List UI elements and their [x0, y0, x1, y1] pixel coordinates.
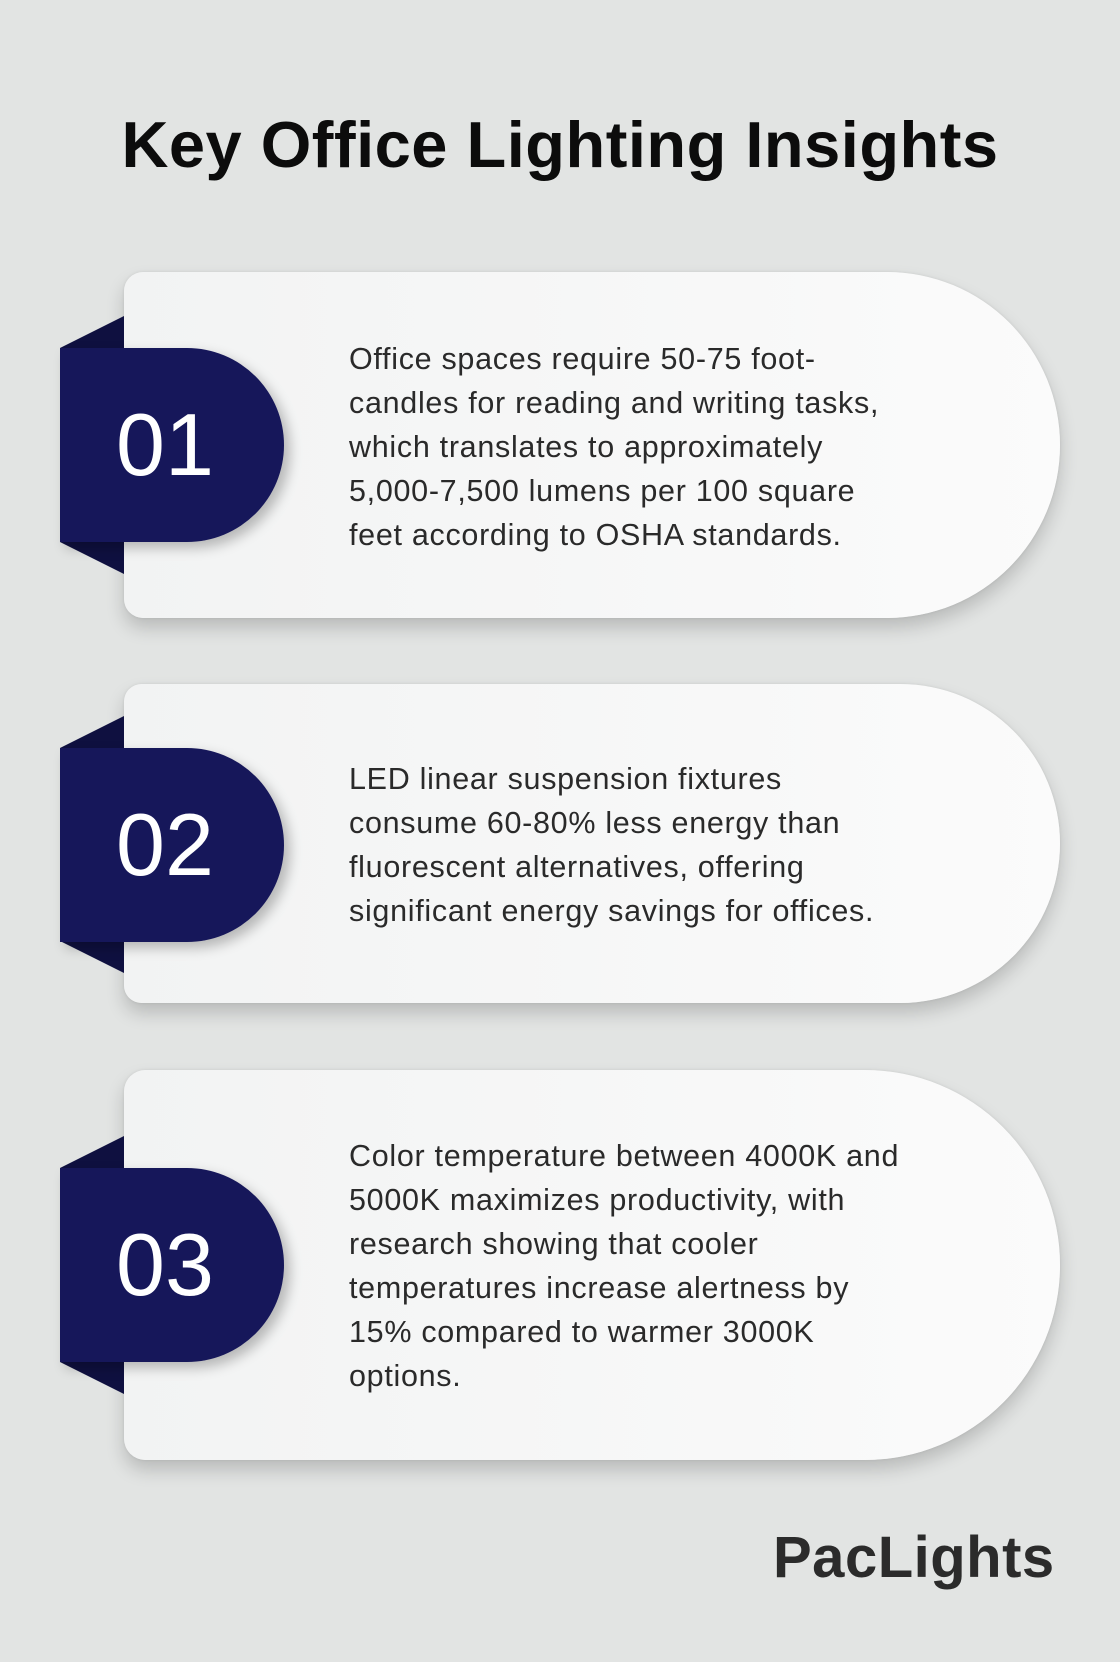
badge 02	[60, 748, 284, 942]
text 2: consume 60-80% less energy than	[349, 806, 840, 840]
text 3: temperatures increase alertness by	[349, 1271, 849, 1305]
text 1: which translates to approximately	[349, 430, 823, 464]
logo: PacLights	[773, 1525, 1055, 1590]
badge 01: 01	[116, 395, 214, 494]
text 1: Office spaces require 50-75 foot-	[349, 342, 816, 376]
fold: card 3	[60, 1136, 124, 1394]
panel: card 2	[124, 684, 1060, 1003]
text 1: candles for reading and writing tasks,	[349, 386, 879, 420]
text 3: 15% compared to warmer 3000K	[349, 1315, 814, 1349]
text 3: research showing that cooler	[349, 1227, 759, 1261]
badge 02: 02	[116, 795, 214, 894]
panel: card 3	[124, 1070, 1060, 1460]
text 1: 5,000-7,500 lumens per 100 square	[349, 474, 855, 508]
text 3: options.	[349, 1359, 461, 1393]
badge 03	[60, 1168, 284, 1362]
badge 03: 03	[116, 1215, 214, 1314]
text 2: fluorescent alternatives, offering	[349, 850, 805, 884]
title: Key Office Lighting Insights	[121, 108, 999, 181]
text 2	[349, 762, 874, 928]
text 3	[349, 1139, 899, 1393]
text 3: 5000K maximizes productivity, with	[349, 1183, 845, 1217]
fold: card 1	[60, 316, 124, 574]
text 3: Color temperature between 4000K and	[349, 1139, 899, 1173]
fold: card 2	[60, 716, 124, 973]
panel: card 1	[124, 272, 1060, 618]
text 1: feet according to OSHA standards.	[349, 518, 842, 552]
badge 01	[60, 348, 284, 542]
text 2: significant energy savings for offices.	[349, 894, 874, 928]
text 1	[349, 342, 879, 552]
text 2: LED linear suspension fixtures	[349, 762, 782, 796]
